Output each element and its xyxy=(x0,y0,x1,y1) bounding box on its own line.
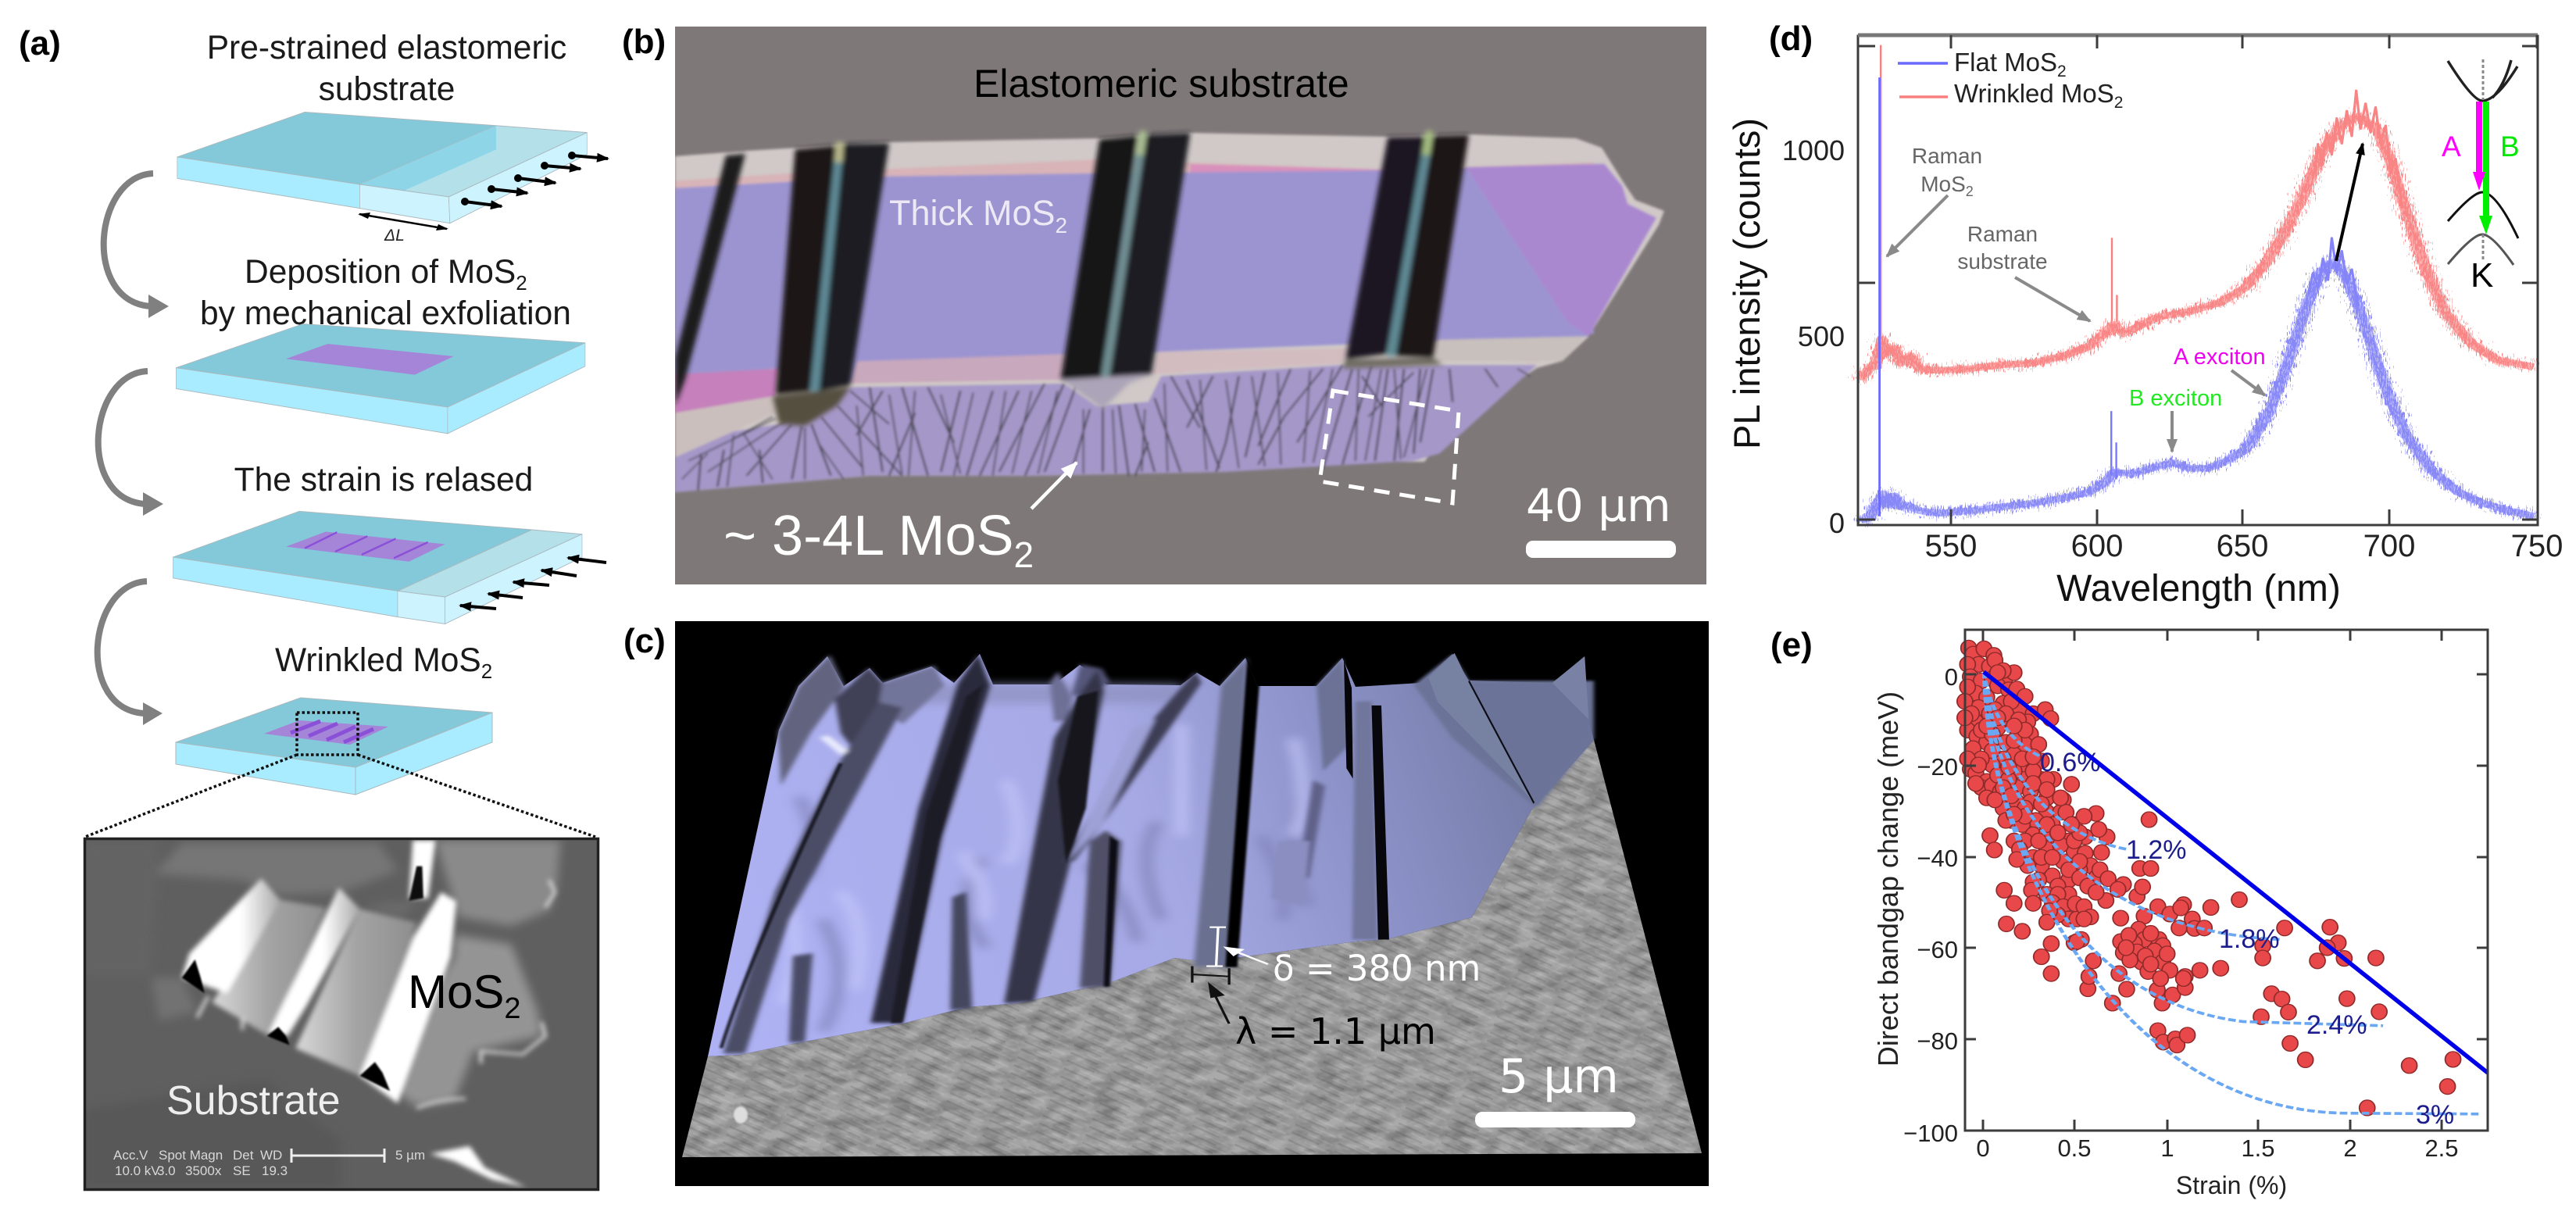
label: 3-4L MoS2: ~ 3-4L MoS xyxy=(723,505,1014,567)
linear fit line xyxy=(1984,672,2488,1073)
band structure inset: B xyxy=(2500,130,2520,163)
y tick labels: 1000 xyxy=(1782,134,1845,166)
wrinkle folds left section xyxy=(721,653,1325,1054)
curved process arrow 2 xyxy=(98,371,163,516)
annotation: Raman substrate xyxy=(1957,222,2090,321)
y tick labels: −20 xyxy=(1917,753,1958,781)
y axis title: PL intensity (counts) xyxy=(1726,118,1767,449)
amplitude bracket and arrow xyxy=(1206,927,1268,967)
bare substrate surface xyxy=(682,740,1702,1157)
label: lambda: λ = 1.1 µm xyxy=(1235,1010,1436,1052)
legend: Wrinkled MoS xyxy=(1954,79,2114,108)
y tick labels: −100 xyxy=(1903,1120,1958,1147)
strain curve labels: 1.2% xyxy=(2126,835,2186,865)
SEM metadata: 10.0 kV xyxy=(115,1163,160,1178)
panel a: fabrication schematic xyxy=(19,24,608,1191)
curved process arrow 1 xyxy=(104,173,169,318)
wrinkled membrane xyxy=(708,654,1594,1056)
legend xyxy=(1898,48,2123,112)
SEM metadata: 19.3 xyxy=(262,1163,288,1178)
strain curve labels: 2.4% xyxy=(2306,1010,2367,1040)
scale bar 5 um xyxy=(1475,1049,1635,1127)
x tick labels: 750 xyxy=(2511,529,2563,563)
band structure inset: K xyxy=(2471,256,2493,295)
plot frame and ticks xyxy=(1858,35,2538,525)
panel label c: (c) xyxy=(623,622,666,660)
y tick labels: −60 xyxy=(1917,936,1958,963)
panel label e: (e) xyxy=(1770,626,1813,664)
wavelength bracket and arrow xyxy=(1192,967,1229,1024)
y tick labels: −80 xyxy=(1917,1027,1958,1055)
x axis title: Strain (%) xyxy=(2176,1171,2287,1199)
tension arrows on slab 1 xyxy=(465,155,608,206)
white arrow to thin region xyxy=(1031,463,1077,509)
scale bar 5 um: 5 µm xyxy=(1499,1049,1619,1104)
optical image background xyxy=(675,27,1706,584)
curved process arrow 3 xyxy=(98,581,163,725)
x tick labels: 2.5 xyxy=(2424,1134,2459,1162)
label: thick MoS2: 2 xyxy=(1056,213,1067,238)
x tick labels xyxy=(1925,529,2563,563)
SEM metadata: 3500x xyxy=(185,1163,222,1178)
plot frame and ticks xyxy=(1965,630,2488,1131)
annotation: Raman MoS2 xyxy=(1887,144,1982,256)
heading: wrinkled MoS2: Wrinkled MoS xyxy=(275,642,481,679)
SEM label MoS2: MoS xyxy=(408,966,504,1018)
y tick labels: 0 xyxy=(1945,663,1958,691)
scale bar 40 um xyxy=(1526,479,1676,558)
annotation: A exciton xyxy=(2174,345,2266,395)
label: elastomeric substrate: Elastomeric substrate xyxy=(974,62,1349,105)
slab 4: wrinkled flake xyxy=(176,698,492,795)
panel label a: (a) xyxy=(19,24,61,63)
slab 2: with MoS2 flake xyxy=(176,324,585,434)
x tick labels: 0 xyxy=(1976,1134,1990,1162)
compression arrows on slab 3 xyxy=(460,558,606,609)
heading: strain released: The strain is relased xyxy=(234,462,533,498)
heading: pre-strained substrate: Pre-strained elastomeric xyxy=(207,30,566,66)
slab 3: relaxed with wrinkles xyxy=(173,511,582,624)
x tick labels: 550 xyxy=(1925,529,1977,563)
dashed region box xyxy=(1320,391,1459,503)
panel e: bandgap vs strain xyxy=(1770,626,2488,1199)
SEM metadata: Spot Magn xyxy=(159,1148,223,1163)
panel c: AFM 3D topography xyxy=(623,621,1709,1186)
x tick labels xyxy=(1976,1134,2459,1162)
heading: pre-strained substrate: substrate xyxy=(319,71,455,108)
annotation: B exciton xyxy=(2129,386,2222,452)
scatter data points xyxy=(1957,640,2461,1116)
y axis title: Direct bandgap change (meV) xyxy=(1872,691,1904,1067)
annotation: A exciton: A exciton xyxy=(2174,345,2266,370)
x tick labels: 2 xyxy=(2343,1134,2357,1162)
SEM metadata xyxy=(113,1148,425,1178)
annotation: Raman MoS2: Raman xyxy=(1912,144,1982,168)
SEM metadata: 3.0 xyxy=(157,1163,176,1178)
slab 1: stretched substrate xyxy=(177,113,587,223)
strain curve labels xyxy=(2040,748,2454,1130)
x tick labels: 650 xyxy=(2217,529,2268,563)
delta L dimension arrow: ΔL xyxy=(384,227,405,245)
scale bar 40 um: 40 µm xyxy=(1526,479,1671,532)
AFM image xyxy=(675,621,1709,1186)
SEM metadata: Acc.V xyxy=(113,1148,148,1163)
annotation: Raman MoS2: 2 xyxy=(1966,184,1974,199)
label: delta: δ = 380 nm xyxy=(1273,948,1481,989)
dark fold stripes xyxy=(675,131,1469,426)
panel label d: (d) xyxy=(1769,20,1813,58)
legend: 2 xyxy=(2114,94,2123,112)
panel label b: (b) xyxy=(622,23,666,61)
wrinkle folds right section xyxy=(1271,654,1594,939)
thin MoS2 region with cracks xyxy=(675,365,1537,492)
x axis title: Wavelength (nm) xyxy=(2056,568,2341,609)
thick flake colour bands xyxy=(675,159,1594,457)
heading: deposition: by mechanical exfoliation xyxy=(200,295,571,332)
x tick labels: 700 xyxy=(2363,529,2415,563)
x tick labels: 0.5 xyxy=(2057,1134,2092,1162)
strain curve labels: 1.8% xyxy=(2219,924,2280,954)
dotted zoom box and guide lines xyxy=(85,713,595,837)
SEM metadata: WD xyxy=(260,1148,282,1163)
y tick labels: 0 xyxy=(1829,507,1845,539)
SEM metadata: SE xyxy=(233,1163,251,1178)
peak shift arrow xyxy=(2336,144,2363,261)
right purple wedge xyxy=(1435,164,1656,361)
legend: Flat MoS xyxy=(1954,48,2057,77)
SEM metadata: Det xyxy=(233,1148,254,1163)
flat MoS2 spectrum xyxy=(1860,77,2534,520)
y tick labels: 500 xyxy=(1798,320,1845,352)
SEM micrograph xyxy=(84,838,599,1191)
label: thick MoS2: Thick MoS xyxy=(889,193,1056,233)
band structure inset: A xyxy=(2442,130,2461,163)
panel d: PL spectra xyxy=(1726,20,2563,609)
legend: 2 xyxy=(2057,63,2067,80)
heading: deposition: Deposition of MoS xyxy=(245,254,516,291)
y tick labels xyxy=(1903,663,1958,1147)
x tick labels: 600 xyxy=(2071,529,2123,563)
SEM label MoS2: 2 xyxy=(504,992,521,1025)
delta L dimension arrow xyxy=(358,213,448,245)
SEM metadata: 5 µm xyxy=(395,1148,425,1163)
annotation: Raman substrate: Raman xyxy=(1967,222,2038,246)
panel b: optical micrograph xyxy=(622,23,1706,584)
strain curve labels: 3% xyxy=(2416,1100,2454,1130)
heading: deposition: 2 xyxy=(516,271,527,295)
SEM label substrate: Substrate xyxy=(166,1078,341,1124)
y tick labels: −40 xyxy=(1917,845,1958,872)
thick flake xyxy=(675,133,1664,492)
annotation: B exciton: B exciton xyxy=(2129,386,2222,411)
small defect xyxy=(734,1106,748,1124)
strain curve labels: 0.6% xyxy=(2040,748,2100,777)
x tick labels: 1.5 xyxy=(2241,1134,2275,1162)
dashed model curves xyxy=(1984,673,2481,1114)
y tick labels xyxy=(1782,134,1845,539)
wrinkled MoS2 spectrum xyxy=(1860,45,2534,380)
x tick labels: 1 xyxy=(2160,1134,2174,1162)
band structure inset xyxy=(2442,59,2520,295)
soft ripples on membrane xyxy=(783,694,1309,1031)
label: 3-4L MoS2: 2 xyxy=(1014,534,1034,575)
heading: wrinkled MoS2: 2 xyxy=(481,659,492,683)
annotation: Raman substrate: substrate xyxy=(1957,249,2048,273)
annotation: Raman MoS2: MoS xyxy=(1920,172,1966,196)
